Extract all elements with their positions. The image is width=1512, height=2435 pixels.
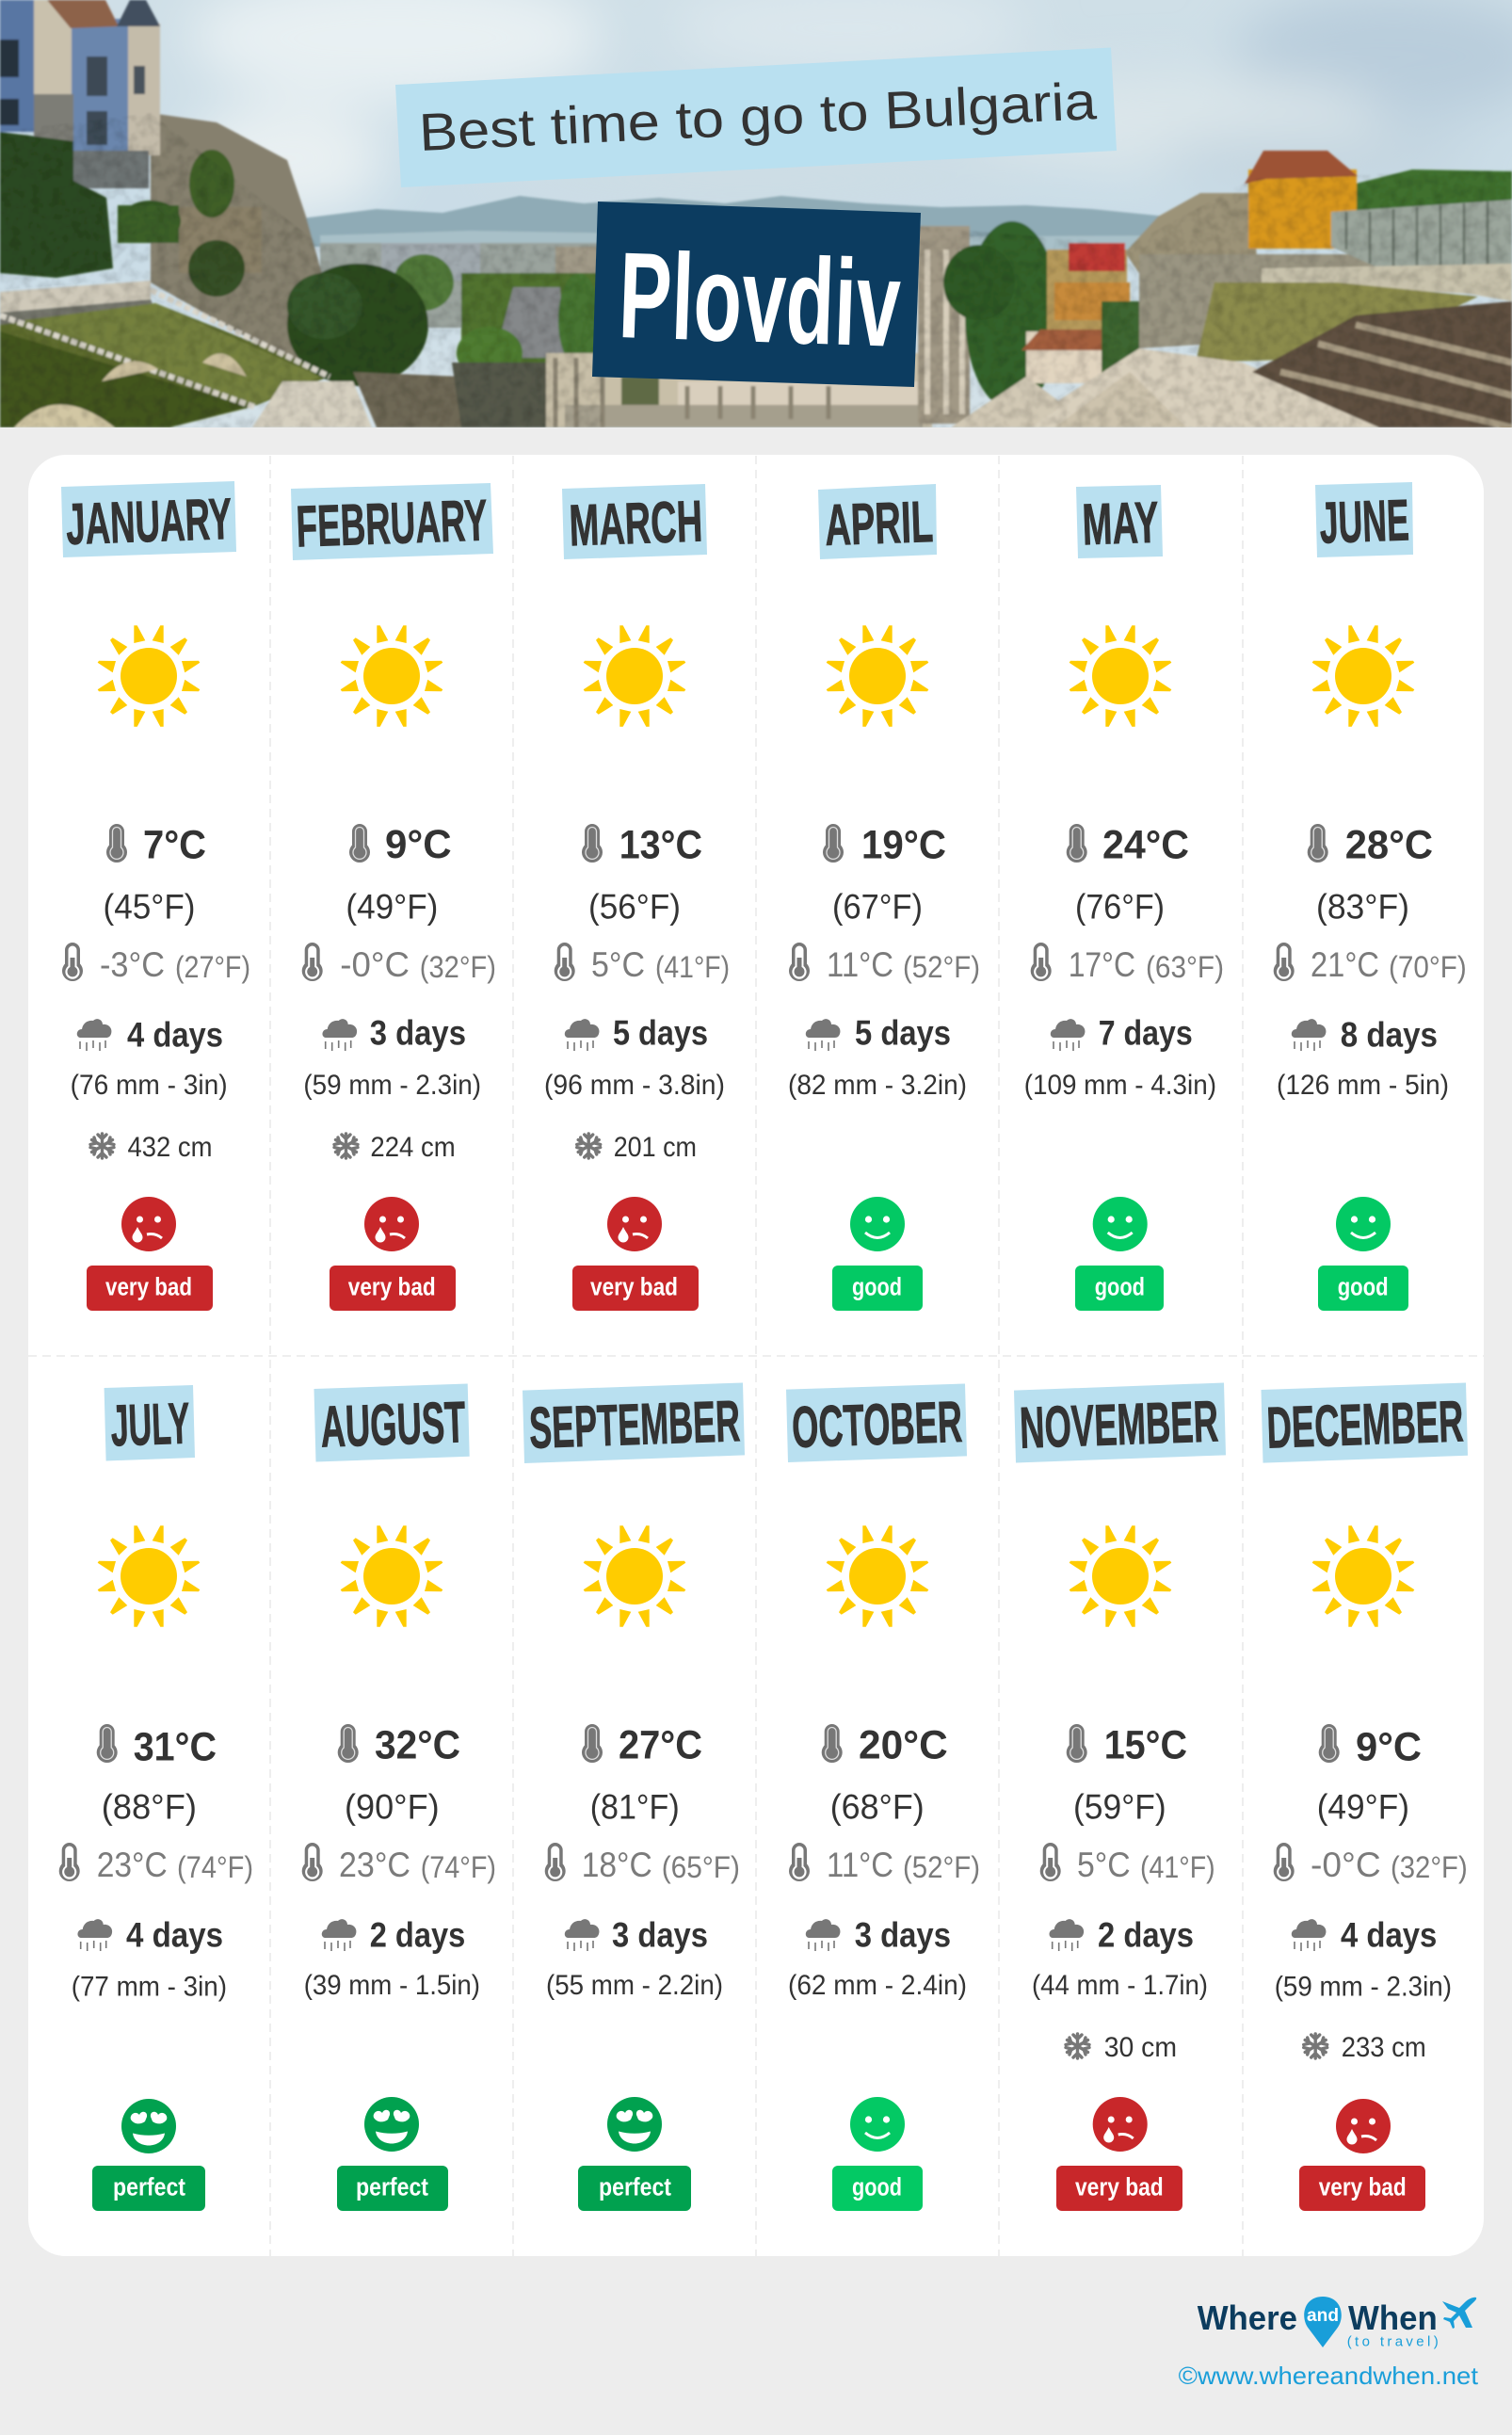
low temperature: 18°C [582,1846,652,1884]
high temperature fahrenheit: (76°F) [1075,887,1165,926]
snowfall [90,1132,213,1163]
month label: MARCH [568,490,703,558]
rainfall amount: (44 mm - 1.7in) [1032,1970,1208,2001]
rainy days [77,1015,223,1054]
left lawn [0,303,334,427]
rating badge: good [852,2173,902,2201]
low temperature: (65°F) [662,1850,740,1884]
low temperature: -0°C [1311,1846,1381,1884]
high temperature: 28°C [1345,823,1433,868]
high temperature [97,1724,217,1769]
low temperature [1031,943,1224,984]
rating badge [832,2166,923,2211]
month label: JUNE [1319,488,1410,556]
high temperature: 32°C [375,1723,460,1768]
high temperature: 9°C [1356,1724,1422,1769]
icon: sun [98,625,200,727]
icon: sun [1070,1525,1171,1627]
icon: sun [584,1525,685,1627]
rainy days [1049,1915,1194,1954]
high temperature: 9°C [385,822,452,867]
diagonal steps [151,290,330,377]
high temperature fahrenheit: (45°F) [104,887,196,926]
rock and tower [151,113,344,377]
low temperature: 11°C [827,945,893,984]
month label [291,483,493,560]
low temperature: (27°F) [175,950,250,984]
low temperature: (32°F) [420,950,496,984]
icon: sun [341,1525,442,1627]
low temperature: 5°C [591,945,645,984]
rainfall amount: (39 mm - 1.5in) [304,1970,480,2001]
rating badge: very bad [348,1273,436,1301]
panel: March [544,484,730,1311]
dark foliage [287,264,428,386]
rainy days: 4 days [126,1915,223,1954]
mountains [301,196,1186,247]
icon: good face [850,1197,905,1251]
rating badge [1299,2166,1425,2211]
icon: good face [850,2097,905,2152]
high temperature [1308,823,1433,868]
icon: very bad face [1093,2097,1148,2152]
high temperature fahrenheit: (83°F) [1316,887,1409,926]
rainy days: 4 days [127,1015,223,1054]
fence [1331,200,1512,268]
month label [818,484,937,559]
snowfall: 432 cm [128,1132,213,1163]
logo: Where and When: (to travel) [1347,2334,1439,2350]
high temperature [1319,1724,1422,1769]
icon: very bad face [1336,2099,1391,2153]
logo: Where and When: Where [1198,2298,1297,2337]
low temperature [545,1843,740,1884]
month label [1014,1382,1226,1463]
rainfall amount: (109 mm - 4.3in) [1024,1070,1216,1101]
title banner: Best time to go to Bulgaria [418,71,1099,162]
month label [314,1384,470,1461]
panel: July [59,1385,253,2211]
left wall and paths [0,281,151,313]
month label [1076,485,1163,558]
rainy days [565,1014,708,1053]
month label: MAY [1082,491,1160,557]
trees behind fence [1356,169,1512,212]
low temperature: (41°F) [655,950,730,984]
rainy days: 8 days [1341,1015,1438,1054]
rating badge: good [852,1273,902,1301]
rainfall amount: (77 mm - 3in) [72,1972,227,2003]
snowfall [1066,2032,1177,2063]
snowfall: 233 cm [1342,2032,1426,2063]
rating badge [337,2166,448,2211]
high temperature: 20°C [859,1723,948,1768]
rainy days [1292,1915,1437,1954]
month label: NOVEMBER [1019,1389,1219,1461]
panel: November [1014,1382,1226,2211]
month label: JANUARY [65,487,233,557]
rating badge: very bad [590,1273,678,1301]
canopies [14,405,115,427]
rating badge: good [1095,1273,1145,1301]
snowfall [334,1132,456,1163]
wooden seating [1252,301,1512,427]
left building [0,0,36,132]
rating badge [1056,2166,1182,2211]
icon: sun [827,1525,928,1627]
high temperature [582,823,702,868]
icon: very bad face [121,1197,176,1251]
month label: SEPTEMBER [528,1389,741,1461]
month label [1315,482,1413,557]
rainy days: 5 days [613,1014,708,1053]
low temperature: (32°F) [1391,1850,1468,1884]
high temperature [1067,1723,1187,1768]
high temperature [349,822,452,867]
rainfall amount: (82 mm - 3.2in) [788,1070,967,1101]
month label [786,1384,967,1462]
rainfall amount: (55 mm - 2.2in) [546,1970,723,2001]
month label [105,1385,195,1461]
month label: APRIL [824,490,934,558]
high temperature fahrenheit: (59°F) [1073,1787,1166,1826]
panel: February [291,483,496,1311]
icon: sun [1312,1525,1414,1627]
month label: FEBRUARY [295,488,489,560]
panel: April [788,484,980,1311]
low temperature: 21°C [1311,945,1379,984]
rating badge: very bad [1319,2173,1407,2201]
rainy days: 2 days [1098,1915,1194,1954]
icon: good face [1336,1197,1391,1251]
icon: perfect face [364,2097,419,2152]
rainy days: 2 days [370,1915,465,1954]
month label [61,481,236,557]
low temperature: (74°F) [421,1850,496,1884]
icon: sun [98,1525,200,1627]
rainy days: 4 days [1341,1915,1437,1954]
rating badge [87,1266,213,1311]
low temperature [1274,1843,1468,1884]
low temperature: -0°C [340,945,410,984]
icon: map pin: and [1307,2306,1339,2326]
high temperature: 19°C [861,823,946,868]
hedges [0,132,113,278]
high temperature fahrenheit: (49°F) [1317,1787,1409,1826]
city name box [592,202,921,387]
logo: Where and When [1198,2297,1476,2350]
title banner [395,47,1117,187]
rainy days [1292,1015,1438,1054]
photo grain [0,113,603,427]
rainy days: 3 days [612,1915,708,1954]
rating badge [92,2166,205,2211]
low temperature [789,1843,980,1884]
rating badge: perfect [113,2173,185,2201]
rating badge [832,1266,923,1311]
rating badge [572,1266,699,1311]
rating badge: very bad [105,1273,192,1301]
hero photo: Plovdiv panorama [0,0,1512,427]
icon: map pin [1304,2297,1342,2347]
rating badge: perfect [599,2173,671,2201]
high temperature: 31°C [134,1724,217,1769]
high temperature: 27°C [619,1723,702,1768]
panel: August [302,1384,496,2211]
rainfall amount: (76 mm - 3in) [71,1070,228,1101]
city [320,243,603,328]
rainy days: 7 days [1099,1014,1193,1053]
icon: sun [584,625,685,727]
logo: Where and When: When [1348,2298,1438,2337]
low temperature: -3°C [100,945,165,984]
high temperature: 13°C [619,823,702,868]
low temperature: 11°C [827,1846,893,1884]
snowfall: 201 cm [614,1132,697,1163]
panel: January [61,481,250,1311]
high temperature [822,1723,948,1768]
low temperature [59,1843,253,1884]
panel: December [1262,1382,1468,2211]
trees right of centre [964,220,1049,401]
rainy days [806,1014,951,1053]
high temperature fahrenheit: (68°F) [830,1787,925,1826]
low temperature: 17°C [1069,945,1135,984]
low temperature: 23°C [97,1846,168,1884]
rainy days: 3 days [855,1915,951,1954]
high temperature: 24°C [1102,823,1189,868]
low temperature: (52°F) [903,1850,980,1884]
low temperature: 23°C [339,1846,410,1884]
high temperature fahrenheit: (90°F) [345,1787,440,1826]
yellow church [1248,169,1357,249]
low temperature: (70°F) [1389,950,1467,984]
rating badge: good [1338,1273,1389,1301]
rainy days: 3 days [370,1014,466,1053]
icon: sun [341,625,442,727]
rainfall amount: (96 mm - 3.8in) [544,1070,725,1101]
low temperature [62,943,250,984]
rainy days [806,1915,951,1954]
high temperature fahrenheit: (81°F) [590,1787,680,1826]
month label: OCTOBER [791,1390,963,1460]
icon: good face [1093,1197,1148,1251]
city name box: Plovdiv [617,226,903,373]
rainfall amount: (59 mm - 2.3in) [1275,1972,1452,2003]
high temperature [338,1723,460,1768]
high temperature fahrenheit: (56°F) [588,887,681,926]
icon: very bad face [607,1197,662,1251]
hill and fort wall [1125,193,1257,273]
high temperature fahrenheit: (49°F) [346,887,438,926]
panel: June [1274,482,1467,1311]
rainy days [77,1915,223,1954]
rating badge: perfect [356,2173,428,2201]
month label: AUGUST [319,1390,467,1460]
low temperature: (74°F) [177,1850,253,1884]
low temperature [555,943,730,984]
rainy days [1051,1014,1193,1053]
high temperature [106,823,206,868]
panel: October [786,1384,980,2211]
month label [562,484,707,559]
snowfall: 30 cm [1104,2032,1177,2063]
panel: months card [28,455,1484,2256]
low temperature [302,1843,496,1884]
low temperature: 5°C [1077,1846,1131,1884]
rainfall amount: (126 mm - 5in) [1277,1070,1449,1101]
snowfall [577,1132,697,1163]
icon: airplane [1442,2298,1476,2329]
low temperature [1040,1843,1215,1884]
red and yellow houses [1047,250,1127,344]
snowfall: 224 cm [370,1132,456,1163]
rating badge [330,1266,456,1311]
high temperature: 15°C [1104,1723,1187,1768]
rating badge [1075,1266,1164,1311]
high temperature fahrenheit: (67°F) [832,887,923,926]
low temperature: (52°F) [903,950,980,984]
right wall and lawn [1262,264,1512,301]
rainy days: 5 days [855,1014,951,1053]
icon: perfect face [121,2099,176,2153]
icon: sun [1312,625,1414,727]
month label: JULY [109,1392,191,1459]
rainy days [322,1014,466,1053]
icon: sun [827,625,928,727]
high temperature [823,823,946,868]
high temperature: 7°C [143,823,206,868]
low temperature [1274,943,1467,984]
high temperature [582,1723,702,1768]
rating badge [578,2166,691,2211]
icon: sun [1070,625,1171,727]
high temperature [1067,823,1189,868]
rating badge: very bad [1075,2173,1164,2201]
marble seats [1017,348,1389,427]
road and trees [394,254,454,311]
rainfall amount: (62 mm - 2.4in) [788,1970,967,2001]
panel: May [1024,485,1224,1311]
rating badge [1318,1266,1408,1311]
copyright url: ©www.whereandwhen.net [1179,2362,1479,2390]
roman theatre columns [546,353,932,427]
icon: perfect face [607,2097,662,2152]
low temperature [302,943,496,984]
panel: September [523,1382,745,2211]
rainfall amount: (59 mm - 2.3in) [303,1070,481,1101]
low temperature: (63°F) [1146,950,1224,984]
icon: very bad face [364,1197,419,1251]
rainy days [322,1915,465,1954]
month label [523,1382,745,1463]
high temperature fahrenheit: (88°F) [102,1787,197,1826]
rainy days [565,1915,708,1954]
low temperature: (41°F) [1140,1850,1215,1884]
low temperature [789,943,980,984]
snowfall [1304,2032,1426,2063]
